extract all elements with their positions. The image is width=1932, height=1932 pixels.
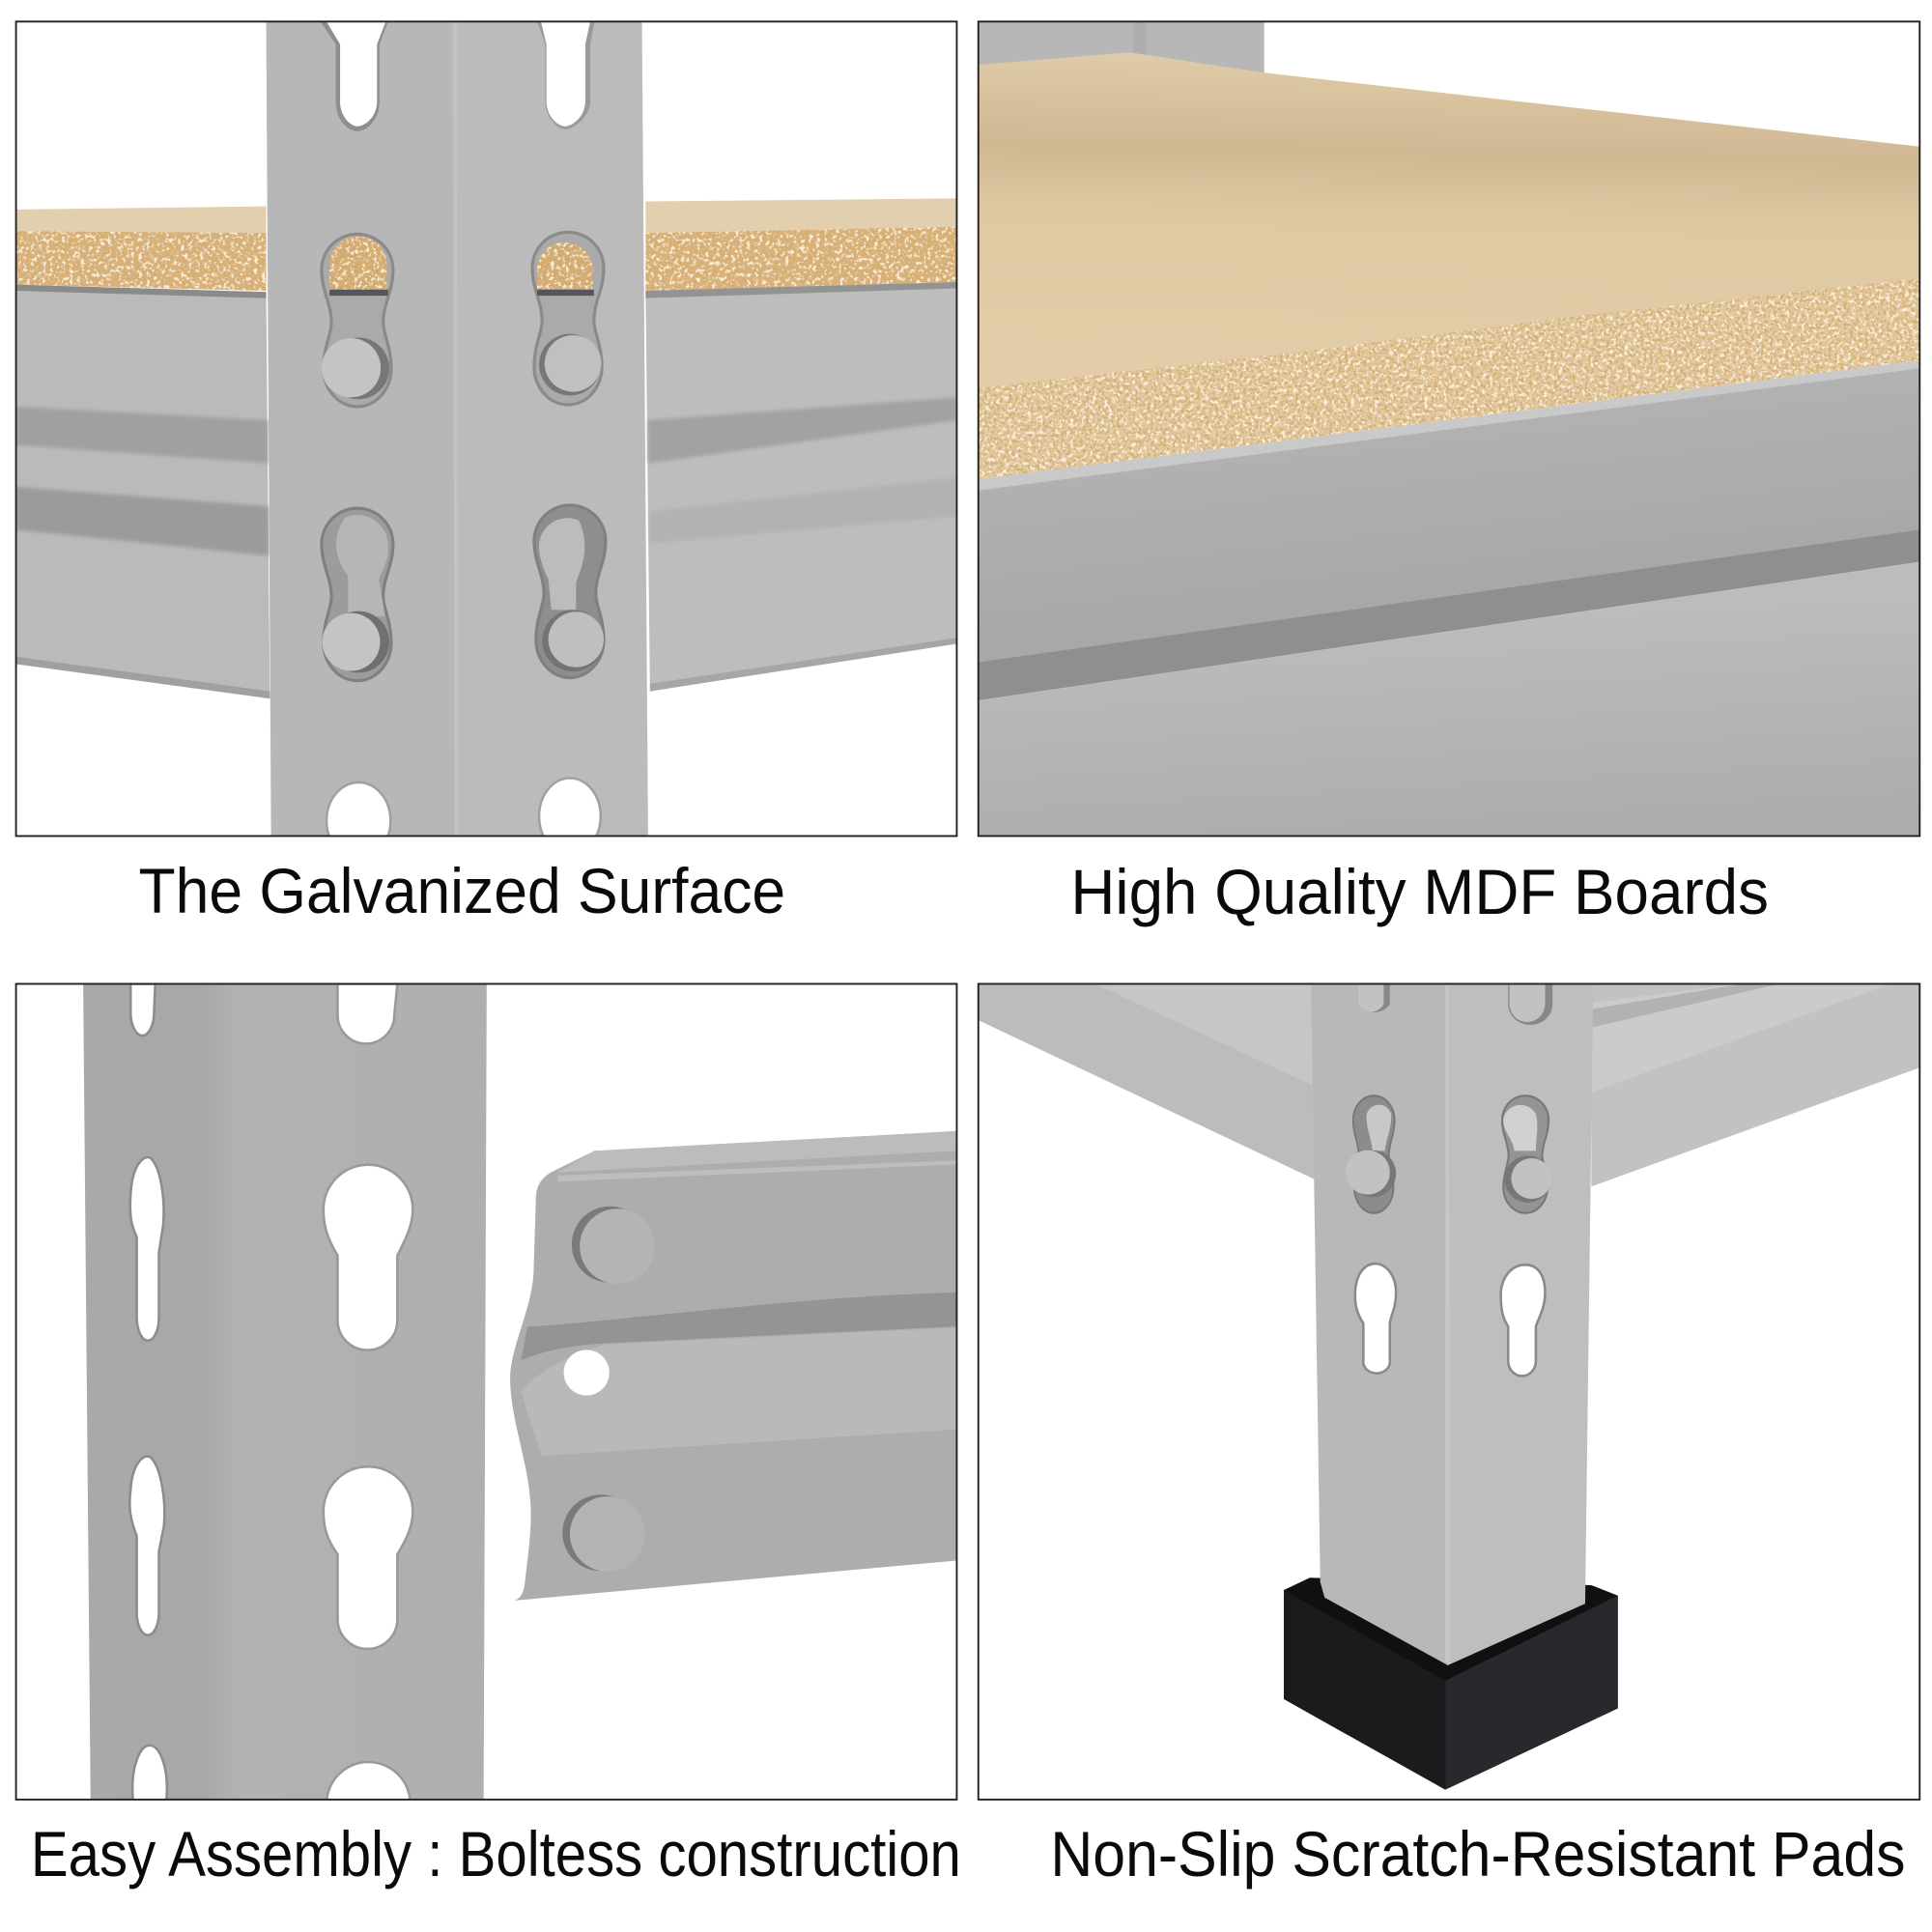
top slots <box>321 21 594 131</box>
upper bolt <box>572 1206 625 1283</box>
left keyhole with bolt <box>1346 1095 1396 1213</box>
photo: upright, beams and pad <box>979 983 1919 1800</box>
lower right keyhole with bolt <box>534 505 606 678</box>
side face holes <box>129 983 167 1832</box>
beam upper face <box>979 363 1919 665</box>
left beam <box>979 983 1314 1179</box>
top bolts <box>1358 983 1552 1025</box>
upper right keyhole with bolt <box>532 232 604 405</box>
rubber pad <box>1284 1577 1618 1790</box>
panel: MDF boards <box>979 21 1919 928</box>
beam lower face <box>979 562 1919 836</box>
board cut edge <box>979 278 1919 479</box>
left open keyhole <box>1355 1264 1396 1374</box>
beam hole <box>564 1350 610 1396</box>
right keyhole with bolt <box>1502 1095 1552 1213</box>
panel border <box>979 983 1919 1800</box>
lower bolt <box>562 1494 612 1571</box>
front face holes <box>324 983 412 1846</box>
photo: upright and beam <box>83 984 956 1799</box>
beam highlight <box>979 360 1919 491</box>
right beam <box>1591 983 1919 1186</box>
back post <box>979 21 1264 74</box>
bottom holes <box>325 777 602 835</box>
left beam <box>16 285 270 698</box>
caption: Easy Assembly : Boltess construction <box>31 1819 961 1890</box>
panel: non-slip pads <box>979 983 1919 1890</box>
lower left keyhole with bolt <box>322 508 393 681</box>
shelf board top surface <box>16 198 956 233</box>
beam groove <box>979 529 1919 700</box>
panel border <box>16 983 956 1800</box>
panel: easy assembly <box>16 983 961 1890</box>
photo: shelf board and beam <box>979 21 1919 836</box>
upright post <box>83 983 487 1800</box>
horizontal beam <box>510 1131 956 1601</box>
right open keyhole <box>1501 1264 1545 1376</box>
photo: upright and shelf beam <box>16 21 956 859</box>
upper left keyhole with bolt <box>322 234 393 407</box>
caption: The Galvanized Surface <box>138 856 785 927</box>
panel: galvanized surface <box>16 21 956 927</box>
caption: High Quality MDF Boards <box>1070 857 1769 928</box>
shelf board cut edge <box>16 227 956 291</box>
upright post <box>267 21 648 836</box>
right beam <box>645 282 956 692</box>
panel border <box>979 21 1919 836</box>
upright post <box>1311 983 1593 1665</box>
board top surface <box>979 52 1919 389</box>
panel border <box>16 21 956 836</box>
